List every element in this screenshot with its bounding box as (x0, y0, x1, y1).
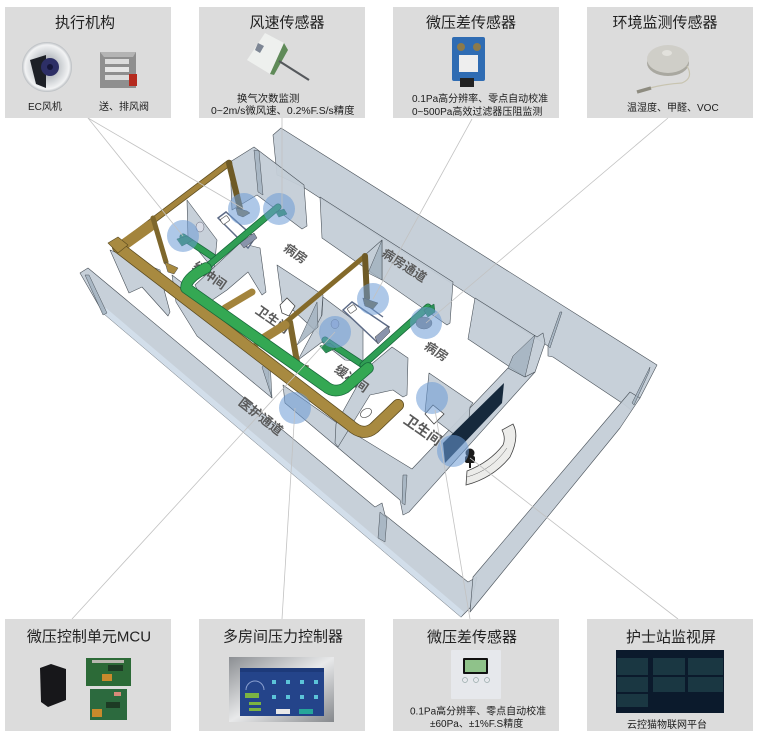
room labels: 病房 (422, 338, 451, 364)
panel: differential pressure sensor top (393, 7, 559, 118)
heading: 多房间压力控制器 (223, 628, 343, 646)
building: walls (80, 128, 657, 617)
room labels (190, 240, 451, 449)
text: pressure specs: 0.1Pa高分辨率、零点自动校准 (410, 704, 546, 718)
panel: differential pressure sensor bottom (393, 619, 559, 731)
icon: room sensor one (196, 222, 204, 232)
icon: controller cabinet (40, 664, 66, 707)
text: pressure specs: 0~500Pa高效过滤器压阻监测 (412, 105, 542, 118)
furniture: beds, toilets, nurse station (218, 212, 516, 485)
heading: 微压差传感器 (427, 629, 517, 646)
panel: MCU (5, 619, 171, 731)
text: pressure specs: 0.1Pa高分辨率、零点自动校准 (412, 92, 548, 105)
heading: 微压差传感器 (426, 14, 516, 32)
icon: nurse station desk (466, 424, 516, 485)
highlight bubbles (167, 193, 469, 467)
icon: damper valve (100, 52, 137, 88)
wall: partition lower right (425, 373, 473, 435)
label: damper: 送、排风阀 (99, 100, 149, 113)
text: pressure specs: ±60Pa、±1%F.S精度 (430, 717, 523, 730)
text: airspeed specs: 0~2m/s微风速、0.2%F.S/s精度 (211, 104, 354, 117)
heading: 执行机构 (55, 14, 115, 32)
text: pressure specs (412, 92, 548, 118)
text: pressure specs (410, 704, 546, 730)
wall: far corridor base strip (103, 308, 464, 617)
room labels: 卫生间 (401, 411, 445, 449)
icon: airspeed sensor (247, 33, 309, 80)
icon: monitoring dashboard (616, 650, 724, 713)
wall: partition middle left (195, 243, 266, 305)
panel: airspeed sensor (199, 7, 365, 118)
icon: wall sensor (451, 650, 501, 699)
wall: rear room wall (230, 147, 307, 229)
icon: bed one (218, 212, 257, 248)
wall: partition upper right (365, 240, 382, 280)
icon: toilet two (425, 405, 444, 424)
room labels: 医护通道 (236, 395, 286, 438)
icon: bed two (343, 302, 390, 344)
icon: VOC sensor (416, 317, 432, 329)
room labels: 缓冲间 (332, 361, 371, 395)
sensors in rooms (196, 222, 432, 329)
room labels: 卫生间 (253, 302, 292, 336)
panel: multi-room pressure controller (199, 619, 365, 731)
icon: controller screen (229, 657, 334, 722)
icon: circuit board one (86, 658, 131, 686)
duct: supply green (177, 207, 435, 391)
wall: partition bed room (298, 297, 363, 362)
heading: 风速传感器 (249, 14, 325, 32)
text: airspeed specs (211, 92, 354, 117)
icon: toilet one (280, 298, 295, 316)
heading: 护士站监视屏 (626, 629, 716, 646)
room labels: 缓冲间 (190, 258, 229, 292)
heading: 微压控制单元MCU (27, 628, 151, 646)
monitor wall screen (443, 383, 504, 463)
heading: 环境监测传感器 (612, 14, 718, 32)
label: EC fan: EC风机 (28, 100, 62, 113)
room labels: 病房通道 (379, 245, 430, 285)
wall: front room wall (283, 368, 535, 515)
wall: partition lower middle (335, 347, 408, 447)
wall: partition middle (277, 265, 323, 335)
leader lines (72, 118, 678, 619)
icon: blue sensor (452, 37, 485, 87)
panel: nurse station monitor (587, 619, 753, 731)
icon: round sensor (637, 45, 690, 92)
wall: partition top left (187, 200, 217, 270)
wall: left room wall B (172, 275, 272, 398)
duct: exhaust brown (108, 163, 398, 432)
panel: actuators (5, 7, 171, 118)
icon: circuit board two (90, 689, 127, 720)
panel: environment sensor (587, 7, 753, 118)
room labels: 病房 (281, 240, 310, 267)
wall: rear outer wall (273, 128, 657, 410)
wall: right ward wall (468, 298, 545, 377)
wall: right outer wall (470, 392, 640, 612)
icon: room sensor two (331, 320, 339, 328)
wall: ward corridor wall (320, 197, 453, 325)
icon: EC fan (22, 42, 72, 92)
text: airspeed specs: 换气次数监测 (237, 92, 299, 105)
wall: far corridor wall (80, 268, 477, 617)
icon: sink (359, 407, 373, 419)
text: environment specs: 温湿度、甲醛、VOC (627, 101, 719, 114)
text: platform name: 云控猫物联网平台 (627, 718, 707, 731)
icon: nurse (465, 448, 475, 468)
wall: glass fins (85, 150, 650, 542)
wall: left room wall A (110, 250, 170, 316)
